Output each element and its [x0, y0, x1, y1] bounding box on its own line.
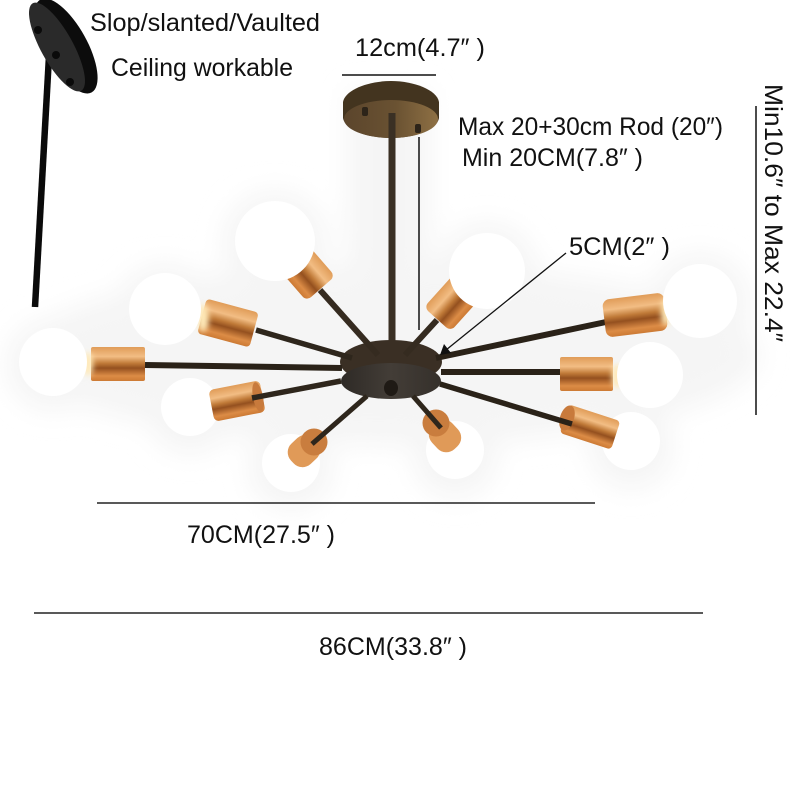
dimension line: total height: [755, 106, 757, 415]
dimension line: canopy width: [342, 74, 436, 76]
icon: slanted ceiling canopy with rod: [19, 0, 110, 307]
arm and bulb: bottom left: [262, 396, 367, 492]
soft shadow halo behind lamp: [7, 90, 760, 510]
arm and bulb: bottom right: [413, 396, 484, 479]
label: 70cm width: 70CM(27.5″ ): [187, 521, 335, 549]
arm and bulb: right: [441, 342, 683, 408]
arm and bulb: top left: [235, 201, 378, 355]
heading: slanted ceiling line 2: Ceiling workable: [111, 54, 293, 82]
label: 86cm width: 86CM(33.8″ ): [319, 633, 467, 661]
arm and bulb: upper right: [436, 264, 737, 358]
label: min rod length: Min 20CM(7.8″ ): [462, 144, 643, 172]
dimension line: 86cm width: [34, 612, 703, 614]
label: hub size: 5CM(2″ ): [569, 233, 670, 261]
label: max rod length: Max 20+30cm Rod (20″): [458, 113, 723, 141]
ceiling canopy and central rod: [343, 81, 439, 350]
arrow: 5cm hub callout: [440, 253, 566, 355]
dimension line: 70cm width: [97, 502, 595, 504]
arm and bulb: far left: [19, 328, 342, 396]
arm and bulb: top right: [405, 233, 525, 355]
arm and bulb: lower left: [161, 378, 341, 436]
central hub: [340, 340, 442, 399]
label: canopy width: 12cm(4.7″ ): [355, 34, 485, 62]
heading: slanted ceiling line 1: Slop/slanted/Vaulted: [90, 9, 320, 37]
dimension line: rod height: [418, 137, 420, 330]
label: total height range: Min10.6″ to Max 22.4″: [759, 84, 787, 342]
arm and bulb: lower right: [440, 384, 660, 470]
arm and bulb: upper left: [129, 273, 352, 358]
